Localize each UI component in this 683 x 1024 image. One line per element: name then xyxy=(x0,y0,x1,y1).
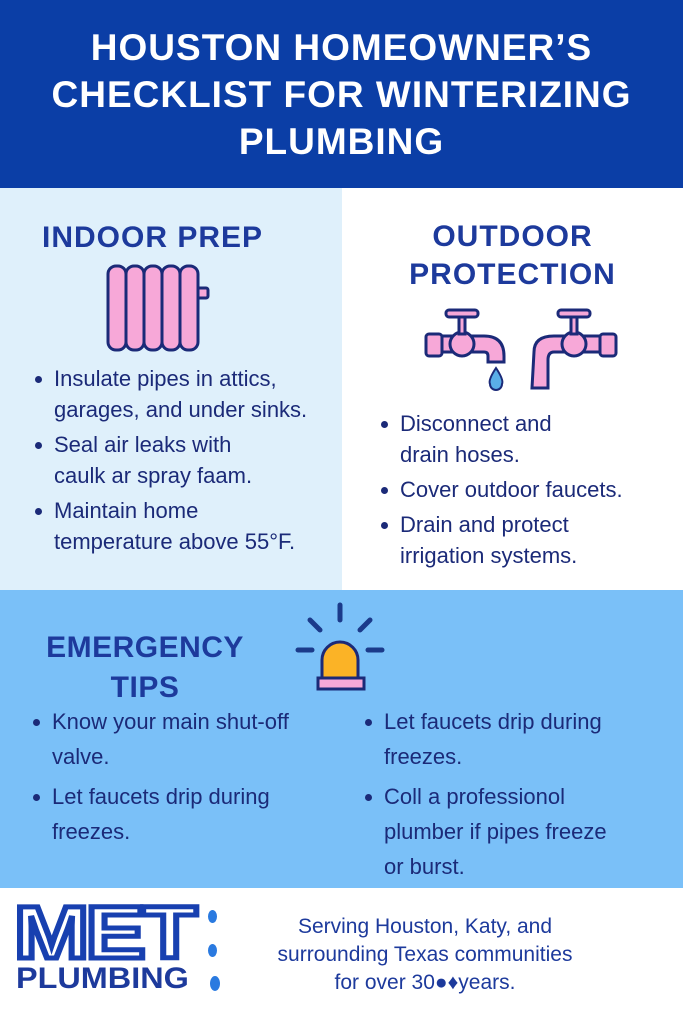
logo: MET: MET xyxy=(14,891,194,974)
logo drops xyxy=(208,910,217,923)
list: emergency left: Let faucets drip during xyxy=(52,784,270,809)
list: outdoor tasks: Drain and protect xyxy=(400,512,569,537)
heading: emergency tips: TIPS xyxy=(111,671,179,704)
list: emergency right: freezes. xyxy=(384,744,462,769)
panel: indoor prep xyxy=(0,188,342,590)
list: indoor tasks xyxy=(35,366,307,554)
list: emergency right: Coll a professionol xyxy=(384,784,565,809)
icon: faucets xyxy=(424,308,618,391)
list: emergency left: freezes. xyxy=(52,819,130,844)
list: emergency left: Know your main shut-off xyxy=(52,709,289,734)
heading: emergency tips xyxy=(46,631,244,704)
header: PLUMBING xyxy=(239,121,444,162)
logo: PLUMBING: PLUMBING xyxy=(16,962,189,995)
icon: radiator xyxy=(106,264,210,352)
list: indoor tasks: garages, and under sinks. xyxy=(54,397,307,422)
list: indoor tasks: Seal air leaks with xyxy=(54,432,231,457)
list: emergency right xyxy=(365,709,607,879)
list: indoor tasks: temperature above 55°F. xyxy=(54,529,295,554)
heading: outdoor protection: PROTECTION xyxy=(409,258,616,291)
list: emergency left xyxy=(33,709,289,844)
list: outdoor tasks: Cover outdoor faucets. xyxy=(400,477,623,502)
icon: alarm light xyxy=(296,602,384,690)
list: emergency right: plumber if pipes freeze xyxy=(384,819,607,844)
list: indoor tasks: caulk ar spray faam. xyxy=(54,463,252,488)
heading: indoor prep: INDOOR PREP xyxy=(42,221,263,254)
heading: outdoor protection: OUTDOOR xyxy=(432,220,593,253)
header: HOUSTON HOMEOWNER’S xyxy=(91,27,592,68)
heading: outdoor protection xyxy=(409,220,616,291)
footer logo xyxy=(14,891,220,995)
footer text: for over 30●♦years. xyxy=(334,971,515,994)
list: indoor tasks: Insulate pipes in attics, xyxy=(54,366,277,391)
list: outdoor tasks xyxy=(381,411,623,568)
list: emergency right: or burst. xyxy=(384,854,465,879)
footer text: Serving Houston, Katy, and xyxy=(298,915,552,938)
panel: emergency tips xyxy=(0,590,683,888)
list: outdoor tasks: drain hoses. xyxy=(400,442,520,467)
list: outdoor tasks: Disconnect and xyxy=(400,411,552,436)
list: indoor tasks: Maintain home xyxy=(54,498,198,523)
list: outdoor tasks: irrigation systems. xyxy=(400,543,577,568)
footer text: surrounding Texas communities xyxy=(278,943,572,966)
list: emergency right: Let faucets drip during xyxy=(384,709,602,734)
header xyxy=(0,0,683,188)
footer text xyxy=(278,915,572,994)
header: CHECKLIST FOR WINTERIZING xyxy=(52,74,631,115)
panel: outdoor protection xyxy=(342,188,683,590)
heading: emergency tips: EMERGENCY xyxy=(46,631,244,664)
list: emergency left: valve. xyxy=(52,744,109,769)
